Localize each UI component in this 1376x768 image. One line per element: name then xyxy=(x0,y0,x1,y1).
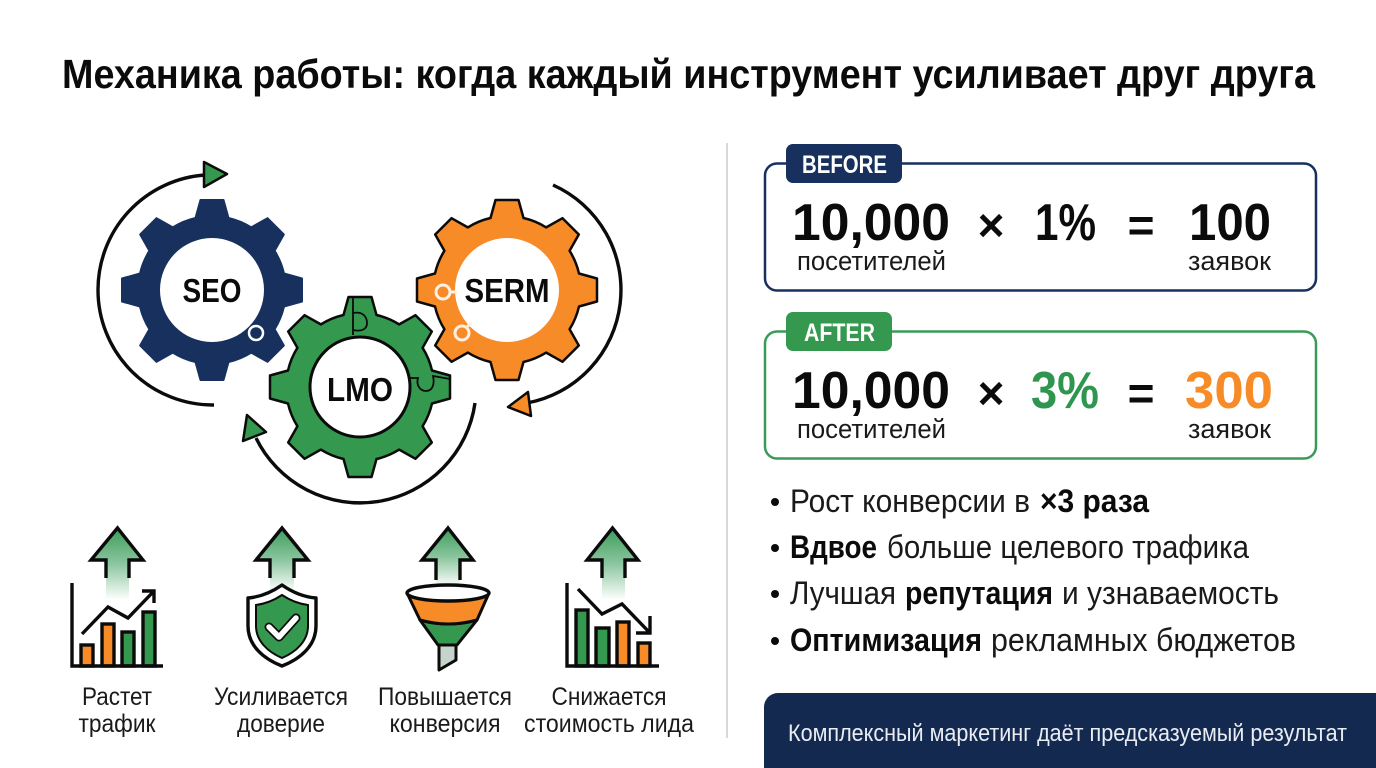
formula: before xyxy=(792,194,1271,276)
formula: before: 1% xyxy=(1035,194,1096,252)
footer banner xyxy=(764,693,1376,768)
benefit: conversion xyxy=(378,528,512,738)
bullet 2: Вдвое xyxy=(790,529,877,565)
formula: after: заявок xyxy=(1188,414,1271,444)
formula: before: 10,000 xyxy=(792,194,950,252)
badge: after: AFTER xyxy=(804,319,875,347)
bullet 4: рекламных бюджетов xyxy=(991,622,1296,658)
icon: up arrow xyxy=(422,528,473,587)
panel: after xyxy=(765,312,1316,458)
arrow: LMO loop xyxy=(243,403,475,503)
badge: before: BEFORE xyxy=(802,151,887,179)
panel: before xyxy=(765,144,1316,290)
label: Растет xyxy=(82,683,152,711)
gear: LMO xyxy=(270,297,450,477)
label xyxy=(214,683,348,738)
bullet 1: Рост конверсии в xyxy=(790,483,1030,519)
bullet 4 xyxy=(771,622,1296,658)
formula: after: посетителей xyxy=(797,414,946,444)
bullet 3: Лучшая xyxy=(790,575,896,611)
benefit: traffic xyxy=(72,528,163,738)
label: Усиливается xyxy=(214,683,348,711)
label xyxy=(78,683,156,738)
formula: after: × xyxy=(978,367,1004,419)
icon: growth chart xyxy=(72,583,163,666)
formula: after: 300 xyxy=(1185,362,1273,420)
badge: after xyxy=(786,312,892,351)
icon: falling chart xyxy=(567,583,659,666)
bullet 3: репутация xyxy=(905,575,1053,611)
formula: before: заявок xyxy=(1188,246,1271,276)
label: Повышается xyxy=(378,683,512,711)
formula: after: 10,000 xyxy=(792,362,950,420)
icon: up arrow xyxy=(587,528,638,600)
bullet 1 xyxy=(771,483,1149,519)
gear: SERM: SERM xyxy=(464,272,550,309)
arrow: SERM loop xyxy=(508,185,621,416)
gear: SEO: SEO xyxy=(182,272,242,309)
label: конверсия xyxy=(390,710,500,738)
label: стоимость лида xyxy=(524,710,694,738)
label: Снижается xyxy=(552,683,666,711)
bullet 3: и узнаваемость xyxy=(1062,575,1279,611)
bullet 4: Оптимизация xyxy=(790,622,982,658)
arrow: SEO loop xyxy=(98,162,227,405)
panel frame xyxy=(765,164,1316,290)
icon: up arrow xyxy=(91,528,143,600)
label xyxy=(378,683,512,738)
gear: SERM xyxy=(417,200,597,380)
formula: before: = xyxy=(1128,199,1154,251)
panel frame xyxy=(765,332,1316,458)
label xyxy=(524,683,694,738)
bullet 3 xyxy=(771,575,1279,611)
bullet 1: ×3 раза xyxy=(1040,483,1149,519)
formula: before: × xyxy=(978,199,1004,251)
benefit: lead cost xyxy=(524,528,694,738)
formula: before: посетителей xyxy=(797,246,946,276)
label: доверие xyxy=(237,710,325,738)
gear: LMO: LMO xyxy=(327,371,393,408)
bullet 2: больше целевого трафика xyxy=(887,529,1249,565)
formula: before: 100 xyxy=(1189,194,1271,252)
formula: after: 3% xyxy=(1031,362,1099,420)
icon: up arrow xyxy=(256,528,308,592)
icon: funnel xyxy=(407,585,489,670)
gear: SEO xyxy=(122,200,302,380)
badge: before xyxy=(786,144,902,183)
benefit: trust xyxy=(214,528,348,738)
gear cycle diagram xyxy=(98,162,621,503)
formula: after xyxy=(792,362,1273,444)
bullet list xyxy=(771,483,1296,658)
label: трафик xyxy=(78,710,156,738)
formula: after: = xyxy=(1128,367,1154,419)
icon: shield xyxy=(248,585,316,666)
